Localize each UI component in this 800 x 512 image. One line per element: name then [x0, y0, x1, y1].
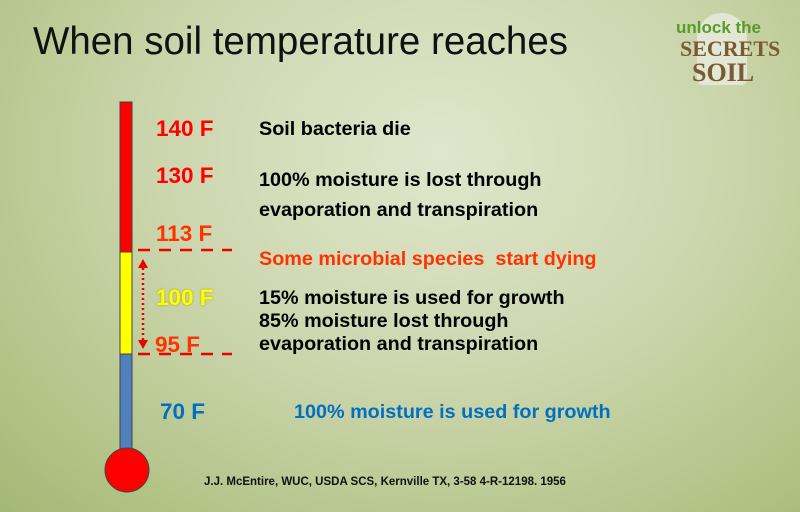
logo: SECRETS: [680, 36, 780, 61]
logo: SOIL: [692, 58, 754, 87]
text: evaporation and transpiration: [259, 199, 538, 221]
labels: 140 F: [156, 116, 214, 141]
text: 100 F: [156, 285, 214, 310]
text: 100% moisture is lost through: [259, 169, 541, 191]
text: evaporation and transpiration: [259, 333, 538, 355]
text: Soil bacteria die: [259, 118, 411, 140]
text: Some microbial species start dying: [259, 248, 596, 270]
text: 95 F: [155, 332, 200, 357]
title: When soil temperature reaches: [33, 20, 568, 63]
text: 85% moisture lost through: [259, 310, 508, 332]
text: 70 F: [160, 399, 205, 424]
text: 113 F: [156, 221, 212, 246]
logo: unlock the: [676, 18, 761, 37]
text: 15% moisture is used for growth: [259, 287, 565, 309]
text: 100% moisture is used for growth: [294, 401, 611, 423]
citation: J.J. McEntire, WUC, USDA SCS, Kernville TX, 3-58 4-R-12198. 1956: [204, 476, 566, 488]
logo: [676, 13, 780, 87]
text: 130 F: [156, 163, 214, 188]
